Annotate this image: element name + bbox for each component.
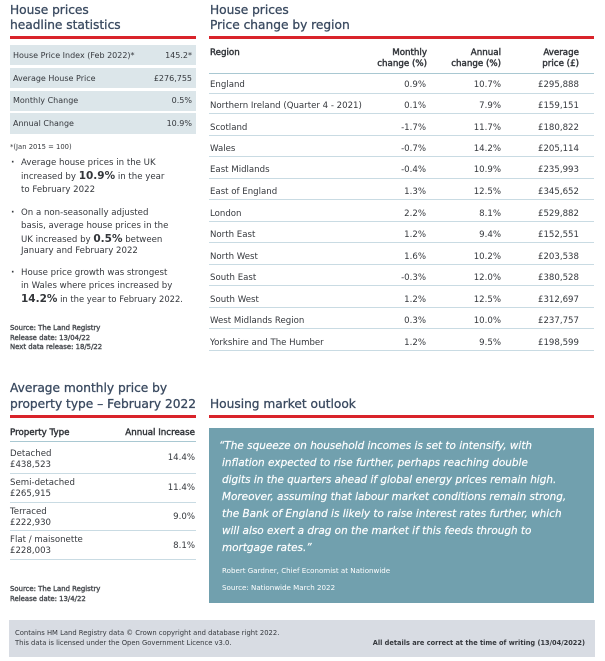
row: Wales: Wales (210, 144, 235, 154)
quote text: Moreover, assuming that labour market conditions remain strong, (222, 491, 566, 503)
row: Northern Ireland: Northern Ireland (Quarter 4 - 2021) (210, 101, 362, 111)
heading: housing market outlook: Housing market outlook (210, 397, 356, 411)
bullet: wales growth (11, 268, 183, 305)
row: East Midlands: East Midlands (210, 165, 270, 175)
stat: house price index (10, 45, 196, 65)
bullet: monthly increase: UK increased by 0.5% between (21, 233, 162, 245)
row: detached: £438,523 (10, 460, 51, 470)
bullet: wales growth: in Wales where prices increased by (21, 281, 172, 291)
row: East Midlands: £235,993 (538, 165, 579, 175)
heading: headline statistics (10, 3, 121, 32)
licence text: Contains HM Land Registry data © Crown copyright and database right 2022. (15, 629, 279, 637)
stat: annual change: Annual Change (13, 119, 74, 128)
row: East Midlands: -0.4% (401, 165, 426, 175)
bullet: annual increase: increased by 10.9% in the year (21, 170, 164, 182)
row: Wales (210, 144, 579, 154)
row: Scotland: £180,822 (538, 123, 579, 133)
quote attribution: Robert Gardner, Chief Economist at Nationwide (222, 566, 390, 575)
bullet: annual increase: Average house prices in the UK (21, 158, 156, 168)
table header (210, 48, 579, 69)
row: South East: £380,528 (538, 273, 579, 283)
table header: Annual Increase (125, 428, 195, 438)
bullet: wales growth: 14.2% in the year to February 2022. (21, 293, 183, 305)
row: Yorkshire and The Humber: 9.5% (479, 338, 501, 348)
row: England: £295,888 (538, 80, 579, 90)
row: North East: 9.4% (479, 230, 501, 240)
source note: Source: The Land Registry (10, 585, 100, 593)
heading: headline statistics: headline statistics (10, 18, 121, 32)
row: Northern Ireland: £159,151 (538, 101, 579, 111)
table header: Monthly (392, 48, 427, 58)
row: North West: 10.2% (474, 252, 501, 262)
bullet: monthly increase: January and February 2022 (21, 246, 138, 256)
stat: monthly change: 0.5% (172, 96, 192, 105)
row: London: £529,882 (538, 209, 579, 219)
table header: Property Type (10, 428, 69, 438)
stat: annual change (10, 113, 196, 134)
quote text: digits in the quarters ahead if global energy prices remain high. (222, 474, 556, 486)
source note: Source: The Land Registry (10, 324, 100, 332)
bullet: annual increase: · (11, 158, 14, 168)
row: South East: South East (210, 273, 256, 283)
row: Northern Ireland: 7.9% (479, 101, 501, 111)
source note: Release date: 13/4/22 (10, 595, 86, 603)
row: South East: -0.3% (401, 273, 426, 283)
row: flat / maisonette: 8.1% (173, 541, 195, 551)
row: Wales: £205,114 (538, 144, 579, 154)
row: Wales: -0.7% (401, 144, 426, 154)
row: Wales: 14.2% (474, 144, 501, 154)
row: East Midlands (210, 165, 579, 175)
row: London: 8.1% (479, 209, 501, 219)
row: West Midlands Region: 0.3% (404, 316, 426, 326)
row: London (210, 209, 579, 219)
source note: Release date: 13/04/22 (10, 334, 90, 342)
bullet: monthly increase: · (11, 208, 14, 218)
row: terraced: Terraced (10, 507, 47, 517)
footer band (9, 620, 595, 657)
row: West Midlands Region: £237,757 (538, 316, 579, 326)
heading: price change by region (210, 3, 350, 32)
row: North East: 1.2% (404, 230, 426, 240)
row: North West: 1.6% (404, 252, 426, 262)
row: East of England (210, 187, 579, 197)
row: South East: 12.0% (474, 273, 501, 283)
row: North East: North East (210, 230, 255, 240)
row: London: 2.2% (404, 209, 426, 219)
row: London: London (210, 209, 242, 219)
row: England: England (210, 80, 245, 90)
footnote: index base: *(Jan 2015 = 100) (10, 143, 72, 151)
table header: Average (543, 48, 579, 58)
row: West Midlands Region: 10.0% (474, 316, 501, 326)
row: terraced: 9.0% (173, 512, 195, 522)
row: North West: North West (210, 252, 258, 262)
quote text (219, 440, 566, 554)
row: West Midlands Region (210, 316, 579, 326)
row: East of England: 1.3% (404, 187, 426, 197)
bullet: annual increase (11, 158, 164, 195)
row: England (210, 80, 579, 90)
row: Yorkshire and The Humber (210, 338, 579, 348)
row: terraced: £222,930 (10, 518, 51, 528)
bullet: annual increase: to February 2022 (21, 185, 95, 195)
stat: monthly change (10, 91, 196, 111)
row: Scotland: Scotland (210, 123, 247, 133)
accuracy note: All details are correct at the time of writing (13/04/2022) (373, 639, 585, 647)
quote text: the Bank of England is likely to raise interest rates further, which (222, 508, 562, 520)
heading: average monthly price (10, 381, 196, 411)
row: South East (210, 273, 579, 283)
row: South West: £312,697 (538, 295, 579, 305)
quote text: “The squeeze on household incomes is set to intensify, with (219, 440, 532, 452)
row: West Midlands Region: West Midlands Region (210, 316, 304, 326)
row: Scotland: -1.7% (401, 123, 426, 133)
row: South West (210, 295, 579, 305)
quote text: mortgage rates.” (222, 542, 312, 554)
row: North East (210, 230, 579, 240)
row: Yorkshire and The Humber: £198,599 (538, 338, 579, 348)
source note (10, 585, 100, 603)
row: South West: 12.5% (474, 295, 501, 305)
row: Yorkshire and The Humber: Yorkshire and The Humber (210, 338, 324, 348)
panel: housing market outlook (209, 397, 594, 603)
row: East of England: 12.5% (474, 187, 501, 197)
heading: average monthly price: property type – February 2022 (10, 397, 196, 411)
row: England: 10.7% (474, 80, 501, 90)
stat: house price index: 145.2* (165, 51, 192, 60)
licence text: This data is licensed under the Open Government Licence v3.0. (15, 639, 232, 647)
stat: monthly change: Monthly Change (13, 96, 78, 105)
row: East Midlands: 10.9% (474, 165, 501, 175)
source note: Next data release: 18/5/22 (10, 343, 102, 351)
row: flat / maisonette: Flat / maisonette (10, 535, 83, 545)
row: North West (210, 252, 579, 262)
row: flat / maisonette: £228,003 (10, 546, 51, 556)
heading: average monthly price: Average monthly price by (10, 381, 167, 395)
row: semi-detached: Semi-detached (10, 478, 75, 488)
stat: average house price: £276,755 (154, 74, 192, 83)
row: Northern Ireland: 0.1% (404, 101, 426, 111)
bullet: monthly increase: basis, average house prices in the (21, 221, 168, 231)
table header: change (%) (377, 59, 427, 69)
row: semi-detached: 11.4% (168, 483, 195, 493)
row: East of England: £345,652 (538, 187, 579, 197)
bullet: wales growth: House price growth was strongest (21, 268, 167, 278)
row: terraced (10, 507, 195, 528)
row: Scotland: 11.7% (474, 123, 501, 133)
row: South West: 1.2% (404, 295, 426, 305)
heading: price change by region: Price change by region (210, 18, 350, 32)
quote text: will also exert a drag on the market if this feeds through to (222, 525, 531, 537)
row: flat / maisonette (10, 535, 195, 556)
row: South West: South West (210, 295, 259, 305)
quote source: Source: Nationwide March 2022 (222, 583, 335, 592)
heading: price change by region: House prices (210, 3, 289, 17)
source note (10, 324, 102, 351)
licence text (14, 629, 279, 647)
row: East of England: East of England (210, 187, 277, 197)
bullet: monthly increase (11, 208, 168, 256)
table header: Region (210, 48, 240, 58)
row: North East: £152,551 (538, 230, 579, 240)
row: North West: £203,538 (538, 252, 579, 262)
table header: change (%) (451, 59, 501, 69)
row: England: 0.9% (404, 80, 426, 90)
row: Northern Ireland (210, 101, 579, 111)
stat: average house price: Average House Price (13, 74, 96, 83)
row: detached: 14.4% (168, 453, 195, 463)
bullet: wales growth: · (11, 268, 14, 278)
row: semi-detached (10, 478, 195, 499)
row: detached: Detached (10, 449, 51, 459)
row: semi-detached: £265,915 (10, 489, 51, 499)
row: Scotland (210, 123, 579, 133)
table header (10, 428, 195, 438)
table header: Annual (471, 48, 501, 58)
stat: average house price (10, 68, 196, 88)
table header: price (£) (542, 59, 579, 69)
stat: annual change: 10.9% (167, 119, 192, 128)
quote text: inflation expected to rise further, perhaps reaching double (222, 457, 528, 469)
quote box (209, 428, 594, 603)
row: Yorkshire and The Humber: 1.2% (404, 338, 426, 348)
heading: headline statistics: House prices (10, 3, 89, 17)
row: detached (10, 449, 195, 470)
panel: price by property type (10, 381, 196, 603)
panel: headline statistics (10, 3, 196, 351)
stat: house price index: House Price Index (Feb 2022)* (13, 51, 135, 60)
bullet: monthly increase: On a non-seasonally adjusted (21, 208, 148, 218)
panel: price change by region (209, 3, 594, 351)
